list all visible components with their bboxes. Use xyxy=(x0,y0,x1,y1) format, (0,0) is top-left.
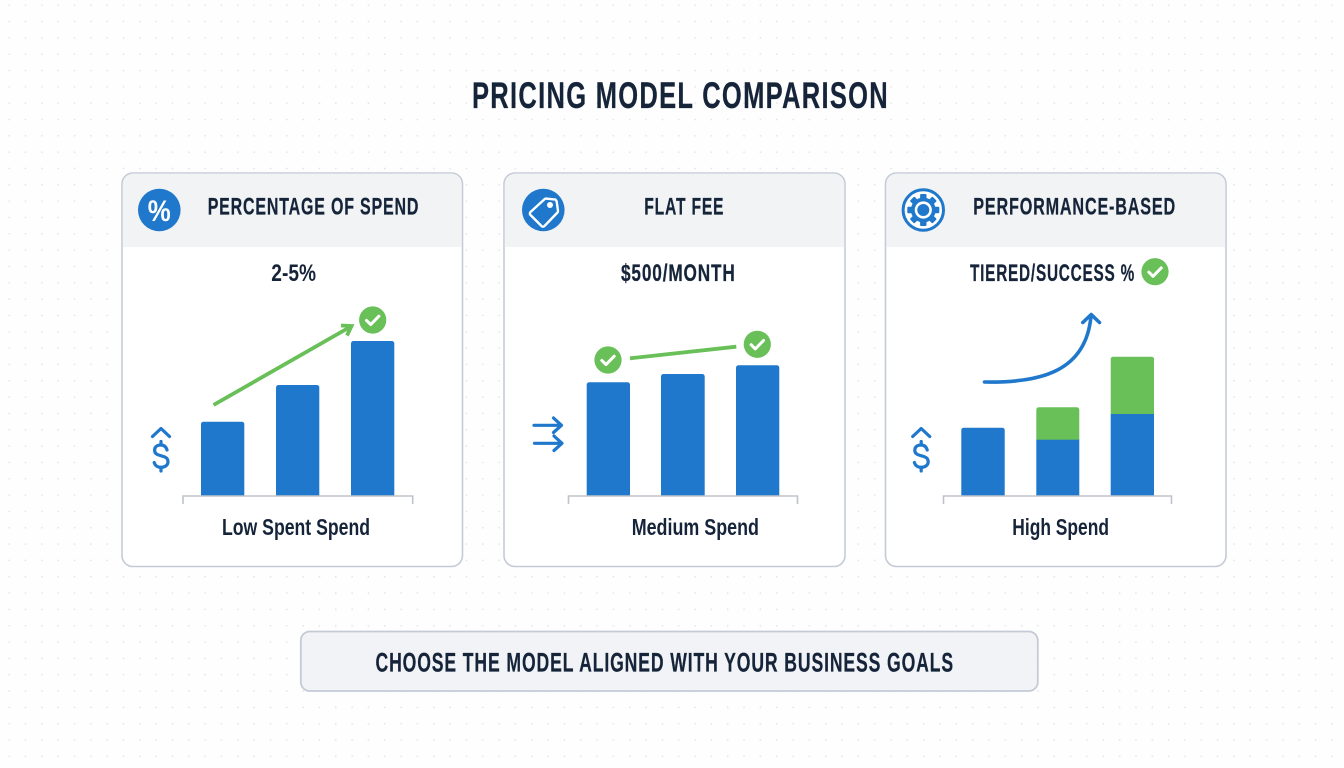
arrow: rising trend xyxy=(214,326,352,405)
icon: check badge xyxy=(359,306,386,334)
line: flat trend xyxy=(630,347,736,358)
heading: flat fee: FLAT FEE xyxy=(644,194,724,220)
icon: double arrows xyxy=(534,418,562,450)
heading: percentage of spend: PERCENTAGE OF SPEND xyxy=(208,194,419,220)
heading: performance-based: PERFORMANCE-BASED xyxy=(973,194,1176,220)
stacked bar chart: high spend xyxy=(944,357,1172,504)
panel header: flat fee xyxy=(505,174,844,247)
rate: $500/month: $500/MONTH xyxy=(621,260,736,287)
icon: percent badge xyxy=(138,189,181,231)
icon: check badge xyxy=(1141,258,1169,285)
icon: percent badge: % xyxy=(148,195,171,228)
icon: gear badge xyxy=(903,190,944,230)
rate: tiered/success %: TIERED/SUCCESS % xyxy=(970,260,1135,287)
arrow: accelerating curve xyxy=(984,314,1100,382)
bar chart: low spend xyxy=(183,341,413,504)
panel header: performance-based xyxy=(886,174,1225,247)
rate: 2-5%: 2-5% xyxy=(271,260,316,287)
axis label: low spent spend: Low Spent Spend xyxy=(222,514,370,540)
panel: performance-based xyxy=(886,173,1226,566)
panel: flat fee xyxy=(504,173,845,566)
icon: check badge left xyxy=(594,346,622,374)
axis label: high spend: High Spend xyxy=(1012,514,1109,540)
panel header: percentage of spend xyxy=(123,174,462,247)
axis label: medium spend: Medium Spend xyxy=(632,514,759,540)
icon: dollar with caret xyxy=(913,428,930,471)
icon: check badge right xyxy=(744,331,771,358)
callout: takeaway xyxy=(301,632,1038,691)
title: PRICING MODEL COMPARISON xyxy=(472,75,889,116)
icon: dollar with caret xyxy=(152,428,170,471)
callout: takeaway: CHOOSE THE MODEL ALIGNED WITH YOUR BUSINESS GOALS xyxy=(376,648,954,678)
bar chart: medium spend xyxy=(568,365,798,504)
panel: percentage of spend xyxy=(122,173,462,566)
icon: price tag badge xyxy=(522,189,565,231)
